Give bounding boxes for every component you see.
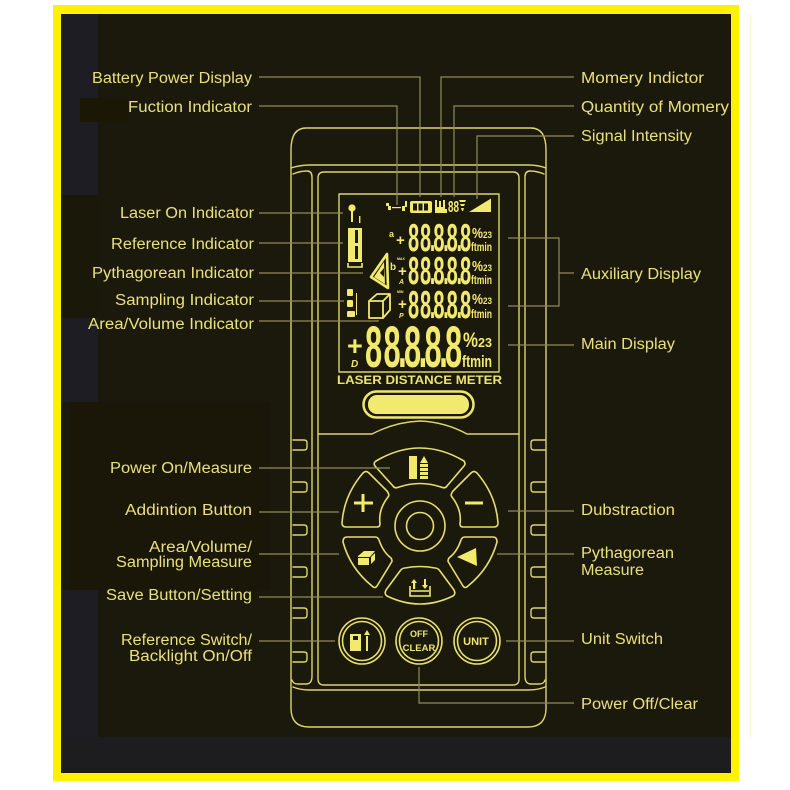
label: pythagorean measure: Measure xyxy=(581,562,644,579)
button: power on / measure xyxy=(374,448,465,488)
auxiliary readout 2 xyxy=(390,249,492,293)
side notches xyxy=(293,440,545,662)
main readout: D xyxy=(351,359,358,370)
icon: laser on xyxy=(348,204,360,223)
button: addition xyxy=(342,472,389,527)
main readout: 88.8.8.8 xyxy=(365,315,462,379)
label: save button setting: Save Button/Setting xyxy=(106,587,252,604)
auxiliary readout 2: b xyxy=(390,262,396,273)
memory quantity digits: 88 xyxy=(448,199,459,216)
icon: pythagorean triangle xyxy=(371,254,388,288)
label: unit switch: Unit Switch xyxy=(581,631,663,648)
icon: cube xyxy=(369,294,390,318)
button: unit xyxy=(454,618,500,664)
auxiliary readout 1: 23 xyxy=(483,230,492,240)
icon: reference bar xyxy=(348,228,362,267)
label: memory indicator: Momery Indictor xyxy=(581,70,704,87)
button: area / volume xyxy=(343,537,392,588)
label: subtraction: Dubstraction xyxy=(581,502,675,519)
main readout: % xyxy=(463,329,478,352)
label: battery power display: Battery Power Display xyxy=(92,70,252,87)
center button xyxy=(395,501,445,551)
auxiliary readout 2: A xyxy=(398,279,404,286)
auxiliary readout 3: % xyxy=(472,291,483,308)
button: pythagorean xyxy=(448,537,497,588)
button: save / setting xyxy=(385,566,455,604)
button: off clear: CLEAR xyxy=(403,643,435,654)
auxiliary readout 2: ftmin xyxy=(471,273,492,287)
auxiliary readout 1: + xyxy=(396,232,405,249)
label: quantity of memory: Quantity of Momery xyxy=(581,99,729,116)
indicator pill xyxy=(364,392,474,418)
button: reference switch xyxy=(339,618,385,664)
label: pythagorean measure: Pythagorean xyxy=(581,545,674,562)
device outline xyxy=(291,128,546,727)
label: area volume indicator: Area/Volume Indicator xyxy=(88,316,254,333)
auxiliary readout 2: % xyxy=(472,258,483,275)
label: main display: Main Display xyxy=(581,336,675,353)
icon: signal intensity xyxy=(459,198,491,212)
icon: memory xyxy=(435,200,447,213)
main readout: 23 xyxy=(478,335,492,350)
auxiliary readout 3 xyxy=(397,283,492,327)
label: addition button: Addintion Button xyxy=(125,502,252,519)
auxiliary readout 3: P xyxy=(399,313,404,320)
button: subtraction xyxy=(451,472,498,527)
label: power on measure: Power On/Measure xyxy=(110,460,252,477)
main readout: ftmin xyxy=(462,352,492,371)
auxiliary readout 3: 88.8.8.8 xyxy=(408,283,471,327)
button: off clear xyxy=(396,618,442,664)
label: power off clear: Power Off/Clear xyxy=(581,696,698,713)
label: reference switch backlight: Reference Switch/ xyxy=(121,632,253,649)
auxiliary readout 1 xyxy=(389,216,492,260)
button: off clear: OFF xyxy=(410,629,428,639)
label: laser on indicator: Laser On Indicator xyxy=(120,205,254,222)
auxiliary readout 1: a xyxy=(389,229,395,239)
main readout xyxy=(347,315,492,379)
product name: LASER DISTANCE METER xyxy=(337,373,502,387)
label: pythagorean measure xyxy=(581,545,674,579)
left labels xyxy=(88,70,254,665)
label: reference switch backlight xyxy=(121,632,253,665)
icon: function indicator xyxy=(386,201,407,211)
icon: sampling xyxy=(347,289,357,317)
label: area volume sampling measure xyxy=(116,539,253,571)
auxiliary readout 3: 23 xyxy=(483,296,492,306)
icon: battery xyxy=(410,201,432,213)
label: reference switch backlight: Backlight On/Off xyxy=(129,648,253,665)
auxiliary readout 1: ftmin xyxy=(471,240,492,254)
label: sampling indicator: Sampling Indicator xyxy=(115,292,254,309)
LCD display xyxy=(339,194,499,379)
auxiliary readout 1: 88.8.8.8 xyxy=(408,216,471,260)
label: auxiliary display: Auxiliary Display xyxy=(581,266,701,283)
right labels xyxy=(581,70,729,713)
auxiliary readout 3: ftmin xyxy=(471,307,492,321)
faint edge line xyxy=(750,14,751,738)
label: pythagorean indicator: Pythagorean Indicator xyxy=(92,265,254,282)
auxiliary readout 2: MAX xyxy=(397,257,405,261)
label: function indicator: Fuction Indicator xyxy=(128,99,252,116)
label: reference indicator: Reference Indicator xyxy=(111,236,254,253)
auxiliary readout 2: + xyxy=(398,263,407,280)
label: area volume sampling measure: Area/Volume/ xyxy=(149,539,253,556)
label: area volume sampling measure: Sampling Measure xyxy=(116,554,252,571)
auxiliary readout 2: 88.8.8.8 xyxy=(408,249,471,293)
auxiliary readout 1: % xyxy=(472,225,483,242)
auxiliary readout 3: + xyxy=(398,296,407,313)
leader lines xyxy=(259,77,574,703)
auxiliary readout 3: MIN xyxy=(397,290,404,294)
button: unit: UNIT xyxy=(463,636,489,648)
auxiliary readout 2: 23 xyxy=(483,263,492,273)
label: signal intensity: Signal Intensity xyxy=(581,128,692,145)
main readout: + xyxy=(347,331,363,361)
